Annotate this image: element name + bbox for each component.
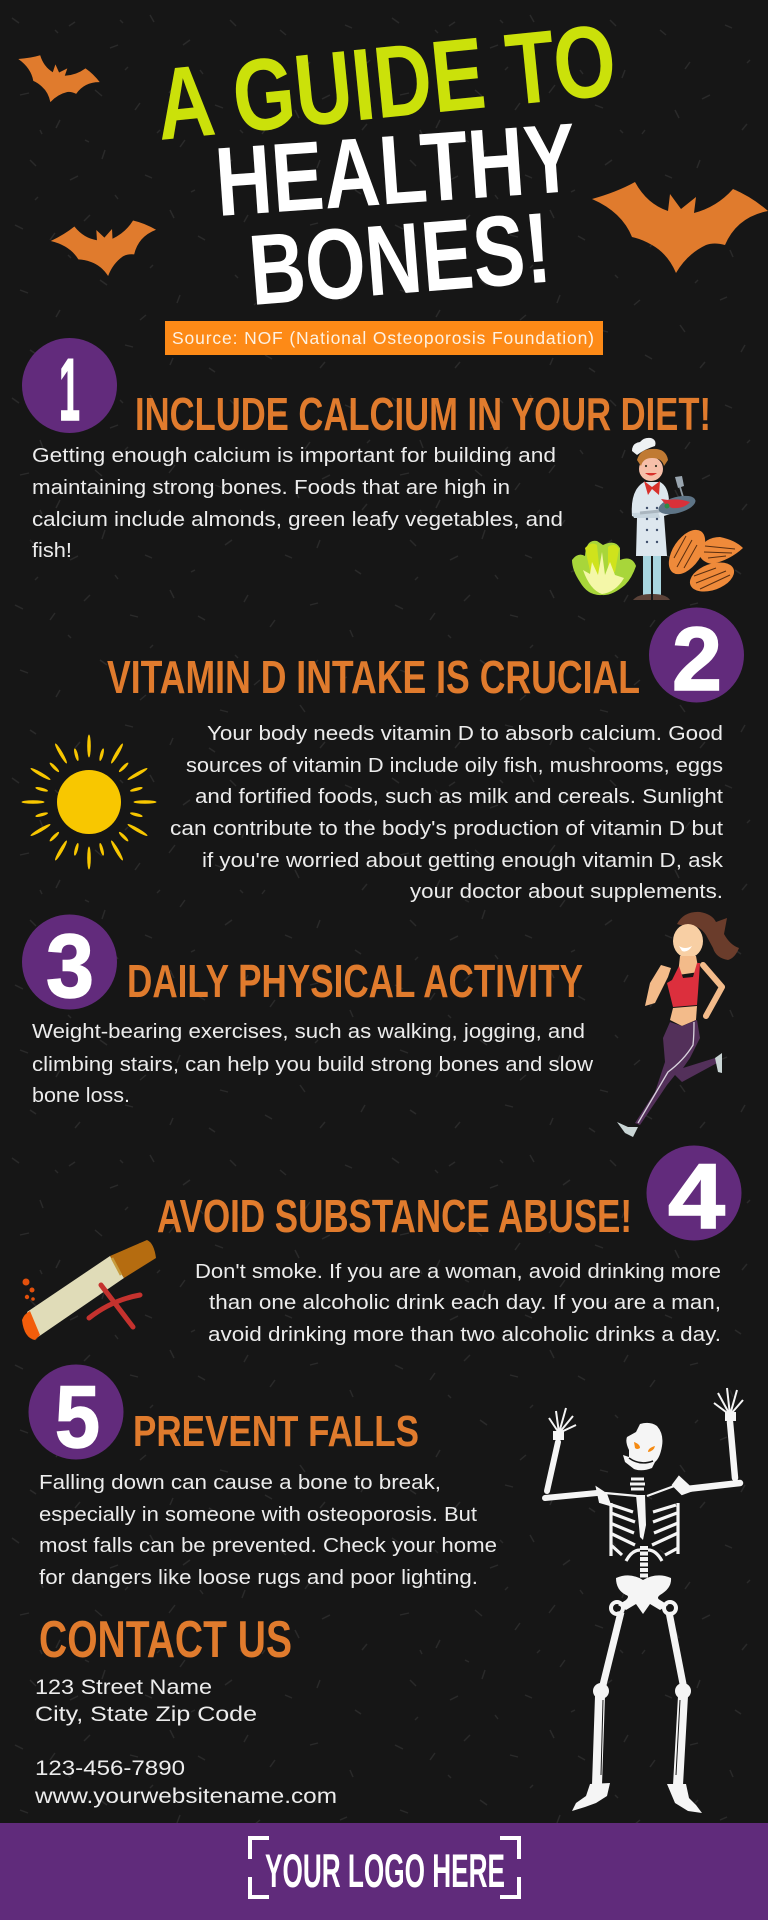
spine: [640, 1546, 648, 1578]
text block 3: climbing stairs, can help you build strong bones and slow: [32, 1054, 594, 1076]
text block 1: fish!: [32, 540, 72, 562]
left arm: [545, 1442, 597, 1498]
face: [673, 924, 703, 958]
text block 5: Falling down can cause a bone to break,: [39, 1472, 441, 1494]
stripe: [638, 1022, 694, 1123]
text block 5: especially in someone with osteoporosis. But: [39, 1504, 477, 1526]
number badge 5: [28, 1364, 124, 1466]
text block 5: most falls can be prevented. Check your home: [39, 1535, 497, 1557]
panel: section 4 substances: [22, 1146, 742, 1346]
pelvis: [616, 1575, 671, 1614]
logo placeholder: [250, 1838, 519, 1897]
palms: [553, 1412, 736, 1440]
shoulders and clavicles: [597, 1477, 693, 1505]
cigarette filter: [110, 1240, 156, 1278]
smile: [679, 946, 692, 951]
legs: [633, 556, 670, 600]
shins: [597, 1696, 683, 1785]
number badge 2: [649, 608, 744, 710]
text block 2: can contribute to the body's production of vitamin D but: [170, 818, 723, 840]
panel: section 2 vitamin D: [22, 608, 744, 903]
icon: large bat right: [592, 182, 768, 273]
spatula: [675, 476, 684, 497]
footer band: [0, 1823, 768, 1920]
shin slits: [601, 1700, 680, 1775]
text block 3: Weight-bearing exercises, such as walking, jogging, and: [32, 1021, 585, 1043]
icon: runner: [617, 912, 739, 1137]
text block 4: avoid drinking more than two alcoholic drinks a day.: [208, 1324, 721, 1346]
panel: section 1 calcium: [22, 338, 743, 600]
head and hat: [632, 438, 668, 481]
text block 2: and fortified foods, such as milk and cereals. Sunlight: [195, 786, 723, 808]
text block 4: [195, 1261, 721, 1346]
text block 2: Your body needs vitamin D to absorb calcium. Good: [207, 723, 723, 745]
logo placeholder: YOUR LOGO HERE: [265, 1844, 505, 1897]
leggings: [635, 1020, 717, 1125]
contact details: 123 Street Name: [35, 1675, 212, 1699]
text block 2: if you're worried about getting enough vitamin D, ask: [202, 850, 724, 872]
panel: section 3 activity: [22, 912, 739, 1137]
text block 5: for dangers like loose rugs and poor lighting.: [39, 1567, 478, 1589]
icon: small bat left: [49, 213, 162, 285]
filter band: [112, 1258, 121, 1275]
contact heading: CONTACT US: [39, 1611, 292, 1669]
cigarette body: [27, 1256, 124, 1337]
contact details: [34, 1675, 337, 1808]
text block 4: Don't smoke. If you are a woman, avoid drinking more: [195, 1261, 721, 1283]
waist: [670, 1006, 697, 1026]
number badge 2: 2: [672, 610, 722, 710]
top: [667, 963, 700, 1007]
shoes: [617, 1053, 722, 1137]
icon: sun: [22, 734, 156, 870]
feet: [572, 1783, 702, 1813]
text block 3: [32, 1021, 594, 1107]
heading 5: PREVENT FALLS: [133, 1407, 419, 1456]
hip joints: [611, 1602, 676, 1614]
left arm: [645, 965, 671, 1006]
icon: cigarette with cross: [22, 1240, 156, 1340]
embers: [22, 1278, 35, 1301]
contact details: www.yourwebsitename.com: [34, 1784, 337, 1808]
right arm: [703, 965, 722, 1016]
ribcage: [636, 1495, 646, 1540]
icon: chef with food: [572, 438, 743, 600]
contact details: 123-456-7890: [35, 1756, 185, 1780]
hands: [549, 1388, 743, 1433]
text block 4: than one alcoholic drink each day. If you are a man,: [209, 1292, 721, 1314]
title: HEALTHY: [212, 102, 580, 237]
number badge 4: [646, 1146, 742, 1248]
number badge 3: 3: [46, 917, 94, 1017]
text block 1: calcium include almonds, green leafy vegetables, and: [32, 509, 563, 531]
text block 5: [39, 1472, 497, 1589]
femurs: [602, 1612, 684, 1689]
lettuce: [572, 541, 636, 595]
title: BONES!: [245, 192, 555, 327]
number badge 1: 1: [59, 340, 80, 439]
source banner: Source: NOF (National Osteoporosis Foundation): [172, 328, 594, 348]
text block 2: your doctor about supplements.: [410, 881, 723, 903]
text block 2: [170, 723, 724, 903]
red cross: [89, 1285, 140, 1327]
contact details: City, State Zip Code: [35, 1702, 257, 1726]
hair: [677, 912, 739, 960]
almond stripes: [674, 536, 735, 589]
number badge 4: 4: [668, 1146, 725, 1248]
almonds: [661, 523, 743, 597]
text block 1: maintaining strong bones. Foods that are high in: [32, 477, 510, 499]
heading 4: AVOID SUBSTANCE ABUSE!: [157, 1190, 632, 1242]
source banner: [165, 321, 603, 355]
number badge 1: [22, 338, 117, 439]
coat: [632, 481, 670, 556]
title: [151, 3, 621, 327]
pan with fish: [640, 492, 697, 518]
heading 3: DAILY PHYSICAL ACTIVITY: [127, 955, 583, 1007]
ribs: [610, 1503, 678, 1561]
number badge 5: 5: [55, 1367, 100, 1466]
panel: section 5 falls: [28, 1364, 497, 1589]
skull: [623, 1423, 662, 1470]
icon: small bat top left: [11, 51, 103, 111]
knees: [593, 1683, 691, 1699]
neck and chest: [678, 956, 699, 975]
neck: [630, 1479, 645, 1489]
text block 3: bone loss.: [32, 1085, 130, 1107]
icon: skeleton: [545, 1388, 743, 1813]
burning tip: [22, 1311, 40, 1340]
right arm: [687, 1422, 740, 1489]
text block 1: [32, 445, 563, 562]
text block 2: sources of vitamin D include oily fish, mushrooms, eggs: [186, 755, 723, 777]
number badge 3: [22, 914, 117, 1017]
text block 1: Getting enough calcium is important for building and: [32, 445, 556, 467]
